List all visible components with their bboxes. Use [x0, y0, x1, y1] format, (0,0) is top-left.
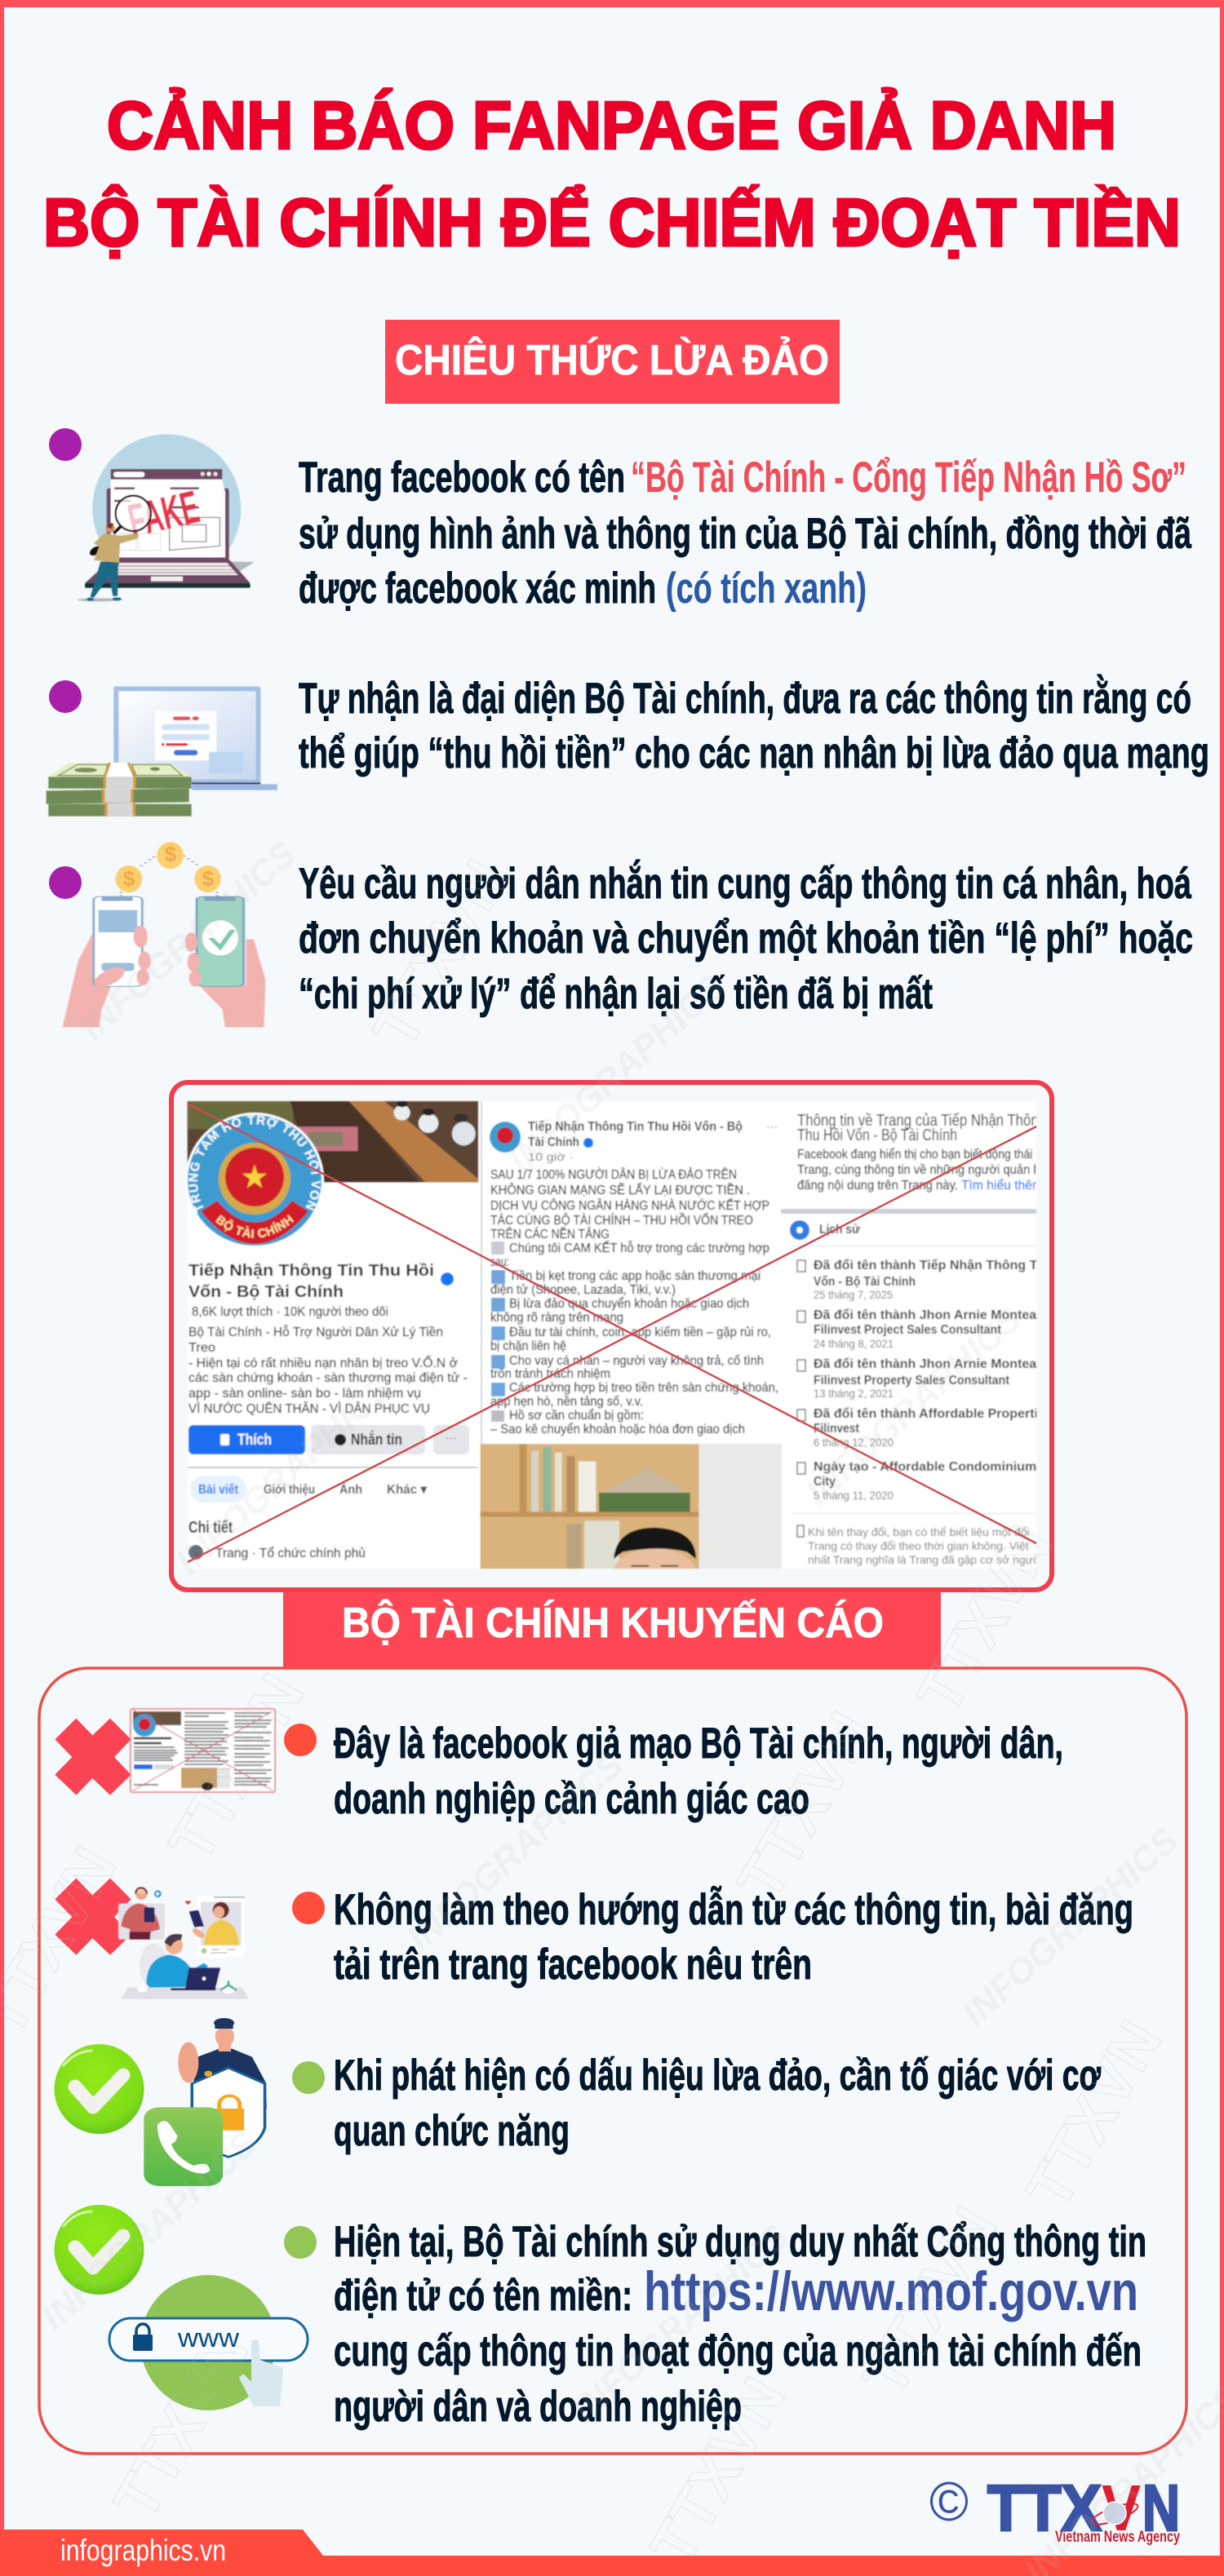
panel: recommendation 1: [55, 1709, 1063, 1823]
middle column post: điện tử (Shopee, Lazada, Tiki, v.v.): [490, 1283, 676, 1297]
middle column post: Cho vay cá nhân – người vay không trả, cố tình: [509, 1354, 764, 1368]
watermark: [0, 834, 1224, 2576]
middle column post: app hẹn hò, nền tảng số, v.v.: [490, 1395, 643, 1409]
middle column post: sau:: [490, 1255, 509, 1269]
bullet: [49, 428, 82, 461]
left column page info: [188, 1262, 478, 1560]
left column page info: app - sàn online- sàn bo - làm nhiệm vụ: [188, 1387, 421, 1401]
middle column post: Chúng tôi CAM KẾT hỗ trợ trong các trường hợp: [509, 1240, 769, 1255]
middle column post: [481, 1101, 778, 1444]
icon: green check: [54, 2205, 144, 2295]
text: (có tích xanh): [666, 564, 867, 613]
icon: fake website on laptop: FAKE: [123, 481, 204, 547]
post photo: bookshelf and person: [480, 1443, 782, 1569]
text: điện tử có tên miền:: [334, 2272, 632, 2320]
right column page transparency: Ngày tạo - Affordable Condominium in Cebu: [814, 1460, 1088, 1474]
right column page transparency: [780, 1112, 1038, 1567]
left column page info: ···: [446, 1431, 457, 1444]
logo: TTXVN: [929, 2471, 1180, 2546]
right column page transparency: Tìm hiểu thêm: [961, 1178, 1043, 1193]
watermark: INFOGRAPHICS: [501, 967, 732, 1180]
watermark: TTXVN: [725, 1701, 886, 1912]
text: “chi phí xử lý” để nhận lại số tiền đã bị mất: [299, 970, 933, 1018]
right column page transparency: Thông tin về Trang của Tiếp Nhận Thông: [797, 1112, 1046, 1130]
icon: secure website address: [109, 2275, 308, 2410]
text: [334, 1720, 1063, 1823]
watermark: TTXVN: [156, 1662, 317, 1873]
panel: scam item 1: [49, 428, 1191, 613]
text: doanh nghiệp cần cảnh giác cao: [334, 1775, 809, 1823]
watermark: INFOGRAPHICS: [798, 1299, 1029, 1512]
watermark: INFOGRAPHICS: [565, 2216, 796, 2430]
middle column post: TÁC CÙNG BỘ TÀI CHÍNH – THU HỒI VỐN TREO: [490, 1211, 753, 1228]
right column page transparency: Khi tên thay đổi, bạn có thể biết liệu một đổi: [808, 1525, 1030, 1538]
icon: red cross: [55, 1719, 131, 1795]
icon: red cross: [55, 1879, 131, 1955]
crest logo: BỘ TÀI CHÍNH: [215, 1214, 295, 1239]
screenshot content: [186, 1100, 1038, 1569]
bullet: [49, 680, 82, 713]
right column page transparency: Trang, cùng thông tin về những người quản lý: [797, 1163, 1042, 1177]
watermark: TTXVN: [1013, 2009, 1175, 2220]
watermark: TTXVN: [637, 2366, 799, 2576]
left column page info: Thích: [237, 1432, 272, 1449]
bullet: [284, 1724, 317, 1756]
icon labels: dollar coins: $: [165, 842, 177, 866]
text: [299, 859, 1193, 1018]
icon: laptop and money stacks: [47, 687, 277, 817]
left column page info: Tiếp Nhận Thông Tin Thu Hồi: [188, 1262, 434, 1280]
watermark: TTXVN: [849, 2196, 1011, 2406]
panel: recommendation 2: [55, 1879, 1133, 1999]
bullet: [284, 2226, 317, 2259]
right column page transparency: Filinvest Property Sales Consultant: [814, 1374, 1010, 1388]
middle column post: KHÔNG GIAN MẠNG SẼ LẤY LẠI ĐƯỢC TIỀN .: [490, 1181, 750, 1197]
cover photo: [188, 1101, 478, 1183]
logo: TTXVN: ©: [929, 2471, 969, 2533]
middle column post: Các trường hợp bị treo tiền trên sàn chứng khoán,: [509, 1381, 778, 1395]
icon: screenshot thumbnail: [131, 1709, 275, 1792]
watermark: INFOGRAPHICS: [33, 2123, 264, 2337]
watermark: TTXVN: [360, 848, 521, 1059]
left column page info: Trang · Tổ chức chính phủ: [215, 1546, 366, 1560]
left column page info: Nhắn tin: [351, 1431, 402, 1449]
left column page info: VÌ NƯỚC QUÊN THÂN - VÌ DÂN PHỤC VỤ: [188, 1401, 430, 1416]
right column page transparency: đăng nội dung trên Trang này.: [797, 1179, 958, 1193]
bullet: [292, 2061, 325, 2094]
middle column post: SAU 1/7 100% NGƯỜI DÂN BỊ LỪA ĐẢO TRÊN: [490, 1166, 737, 1182]
crest logo: TRUNG TÂM HỖ TRỢ THU HỒI VỐN: [188, 1114, 322, 1214]
watermark: INFOGRAPHICS: [73, 834, 304, 1047]
text: người dân và doanh nghiệp: [334, 2383, 742, 2431]
middle column post: Tiền bị kẹt trong các app hoặc sàn thương mại: [509, 1269, 761, 1283]
middle column post: Bị lừa đảo qua chuyển khoản hoặc giao dịch: [509, 1296, 749, 1311]
left column page info: 8,6K lượt thích · 10K người theo dõi: [192, 1305, 388, 1319]
middle column post: TRÊN CÁC NỀN TẢNG: [490, 1226, 610, 1242]
heading: bộ tài chính khuyến cáo: BỘ TÀI CHÍNH KHUYẾN CÁO: [342, 1599, 884, 1647]
right column page transparency: Filinvest: [814, 1422, 860, 1436]
icon: green check: [54, 2044, 144, 2134]
red cross over screenshot: [188, 1104, 1036, 1562]
text: Trang facebook có tên: [299, 454, 625, 502]
text: tải trên trang facebook nêu trên: [334, 1941, 812, 1989]
panel: fake facebook page screenshot: [169, 1080, 1054, 1592]
middle column post: Đầu tư tài chính, coin, app kiếm tiền – gặp rủi ro,: [509, 1326, 771, 1339]
icon labels: dollar coins: $: [123, 866, 135, 891]
text: [334, 2052, 1101, 2155]
text: [334, 1885, 1133, 1989]
panel: recommendation 4: [54, 2205, 1146, 2431]
right column page transparency: Đã đổi tên thành Affordable Properties by: [814, 1406, 1071, 1421]
crest logo: ★: [242, 1162, 268, 1192]
heading: chiêu thức lừa đảo: [385, 320, 840, 404]
panel: recommendations outline: [39, 1668, 1186, 2454]
icon: police officer with shield and phone: [144, 2018, 267, 2186]
left column page info: Khác ▾: [387, 1483, 428, 1497]
right column page transparency: 24 tháng 8, 2021: [814, 1337, 894, 1350]
icon: fake website on laptop: [78, 434, 255, 601]
right column page transparency: Đã đổi tên thành Jhon Arnie Montealegre: [814, 1357, 1068, 1371]
heading: chiêu thức lừa đảo: CHIÊU THỨC LỪA ĐẢO: [395, 336, 829, 384]
title: BỘ TÀI CHÍNH ĐỂ CHIẾM ĐOẠT TIỀN: [43, 184, 1181, 260]
right column page transparency: Trang có thay đổi theo thời gian không. Việt: [808, 1539, 1029, 1552]
title: [43, 86, 1181, 260]
text: [334, 2218, 1146, 2431]
right column page transparency: Thu Hồi Vốn - Bộ Tài Chính: [797, 1126, 957, 1144]
middle column post: bị chặn liên hệ: [490, 1339, 566, 1353]
left column page info: Vốn - Bộ Tài Chính: [188, 1283, 344, 1301]
right column page transparency: City: [814, 1475, 836, 1489]
footer bar: [0, 2530, 1224, 2576]
icon labels: dollar coins: $: [202, 866, 215, 891]
middle column post: DỊCH VỤ CÔNG NGÂN HÀNG NHÀ NƯỚC KẾT HỢP: [490, 1197, 769, 1213]
left column page info: Chi tiết: [188, 1519, 233, 1537]
left column page info: Bộ Tài Chính - Hỗ Trợ Người Dân Xử Lý Tiền: [188, 1324, 443, 1339]
panel: recommendation 3: [54, 2018, 1101, 2186]
heading: bộ tài chính khuyến cáo: [283, 1592, 941, 1668]
watermark: TTXVN: [100, 2320, 262, 2530]
text: [299, 454, 1191, 613]
left column page info: Ảnh: [339, 1481, 362, 1497]
right column page transparency: 6 tháng 12, 2020: [814, 1436, 894, 1449]
right column page transparency: Facebook đang hiển thị cho bạn biết động thái của: [797, 1147, 1054, 1162]
middle column post: trốn tránh trách nhiệm: [490, 1367, 610, 1381]
title: CẢNH BÁO FANPAGE GIẢ DANH: [107, 86, 1116, 163]
text: quan chức năng: [334, 2107, 570, 2155]
icon: secure website address: www: [177, 2323, 240, 2352]
middle column post: Tài Chính: [528, 1135, 579, 1149]
right column page transparency: Đã đổi tên thành Tiếp Nhận Thông Tin Thu Hồi: [814, 1258, 1101, 1273]
icon: people on social media: [118, 1888, 249, 1999]
panel: scam item 2: [47, 674, 1209, 817]
middle column post: Hồ sơ cần chuẩn bị gồm:: [509, 1408, 644, 1423]
panel: scam item 3: [49, 842, 1193, 1027]
left column page info: Bài viết: [198, 1483, 239, 1497]
middle column post: Tiếp Nhận Thông Tin Thu Hồi Vốn - Bộ: [528, 1120, 743, 1134]
watermark: INFOGRAPHICS: [169, 1368, 400, 1582]
footer bar: infographics.vn: [60, 2534, 226, 2567]
right column page transparency: Đã đổi tên thành Jhon Arnie Montealegre: [814, 1308, 1068, 1322]
logo: TTXVN: V: [1102, 2472, 1141, 2544]
screenshot frame: [171, 1082, 1052, 1590]
text: được facebook xác minh: [299, 564, 656, 613]
text: [299, 674, 1209, 777]
logo: TTXVN: TTX: [987, 2472, 1102, 2544]
watermark: INFOGRAPHICS: [400, 1745, 631, 1959]
logo: TTXVN: Vietnam News Agency: [1055, 2529, 1180, 2546]
logo: TTXVN: N: [1142, 2472, 1180, 2544]
middle column post: – Sao kê chuyển khoản hoặc hóa đơn giao dịch: [490, 1422, 745, 1436]
right column page transparency: Vốn - Bộ Tài Chính: [814, 1275, 916, 1289]
left column page info: Treo: [188, 1341, 215, 1355]
right column page transparency: 25 tháng 7, 2025: [814, 1288, 893, 1301]
icon: phones transferring money: [63, 842, 265, 1027]
icon labels: dollar coins: [123, 842, 215, 891]
middle column post: 10 giờ ·: [528, 1150, 574, 1163]
left column page info: - Hiện tại có rất nhiều nạn nhân bị treo V.Ố.N ở: [188, 1354, 458, 1370]
watermark: INFOGRAPHICS: [955, 1820, 1186, 2034]
right column page transparency: Filinvest Project Sales Consultant: [814, 1323, 1002, 1337]
left column page info: Giới thiệu: [264, 1483, 315, 1497]
right column page transparency: nhất Trang nghĩa là Trang đã gặp cơ sở người: [808, 1553, 1043, 1566]
right column page transparency: Lịch sử: [819, 1223, 860, 1237]
watermark: TTXVN: [904, 1514, 1066, 1724]
right column page transparency: 5 tháng 11, 2020: [814, 1489, 894, 1502]
bullet: [292, 1892, 325, 1924]
middle column post: không rõ ràng trên mạng: [490, 1311, 623, 1325]
left column page info: các sàn chứng khoán - sàn thương mại điện tử -: [188, 1371, 468, 1385]
middle column post: ···: [766, 1120, 778, 1133]
right column page transparency: 13 tháng 2, 2021: [814, 1387, 894, 1400]
bullet: [49, 866, 82, 899]
